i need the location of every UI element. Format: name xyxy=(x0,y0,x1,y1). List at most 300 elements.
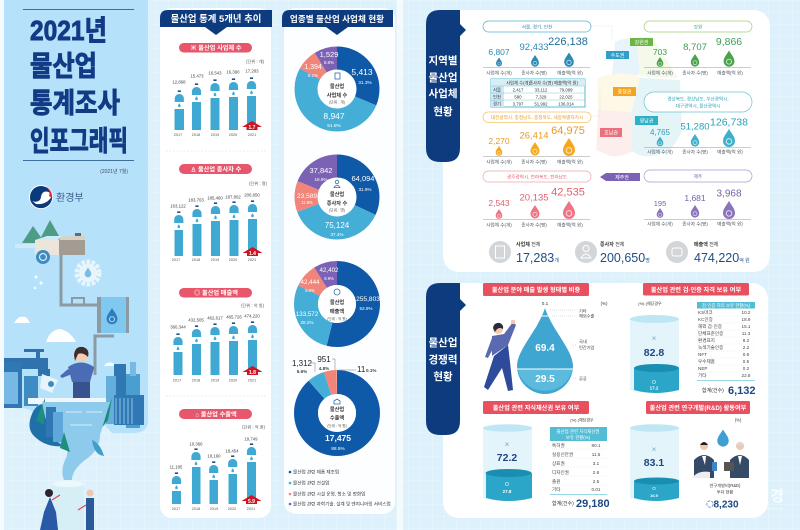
total: sales xyxy=(666,241,750,265)
region: Seoul Gyeonggi Incheon: 매출액(억 원) xyxy=(557,70,583,76)
donut: employees: 18.9% xyxy=(314,177,328,182)
region: Gwangju Jeolla: 20,135 xyxy=(519,192,549,204)
region: Seoul Gyeonggi Incheon: 92,433 xyxy=(519,42,549,53)
chart: number of employees: 2017 xyxy=(172,258,180,262)
chart: number of businesses: 16,543 xyxy=(208,70,222,76)
icon: large water drop: 69.4 xyxy=(535,343,555,354)
total: employees: 종사자 전체 xyxy=(600,241,625,248)
region: Gwangju Jeolla: 42,535 xyxy=(551,186,585,198)
donut: businesses: 31.3% xyxy=(358,80,373,86)
map: Korea regions: 영남권 xyxy=(640,118,654,124)
table: IP types: 출원 xyxy=(552,478,560,485)
region: Gwangju Jeolla: 2,543 xyxy=(488,198,510,208)
table: certification types: 22.8 xyxy=(742,373,751,378)
table: IP types: 디자인권 xyxy=(552,469,569,476)
table: certification types: 10.2 xyxy=(742,310,751,315)
chart: number of employees: 163,122 xyxy=(170,204,186,208)
map: Korea regions: 호남권 xyxy=(604,130,618,136)
table: certification types: NFT xyxy=(698,352,707,357)
chart: sales: 465,726 xyxy=(226,314,242,320)
map: Korea regions: 충청권 xyxy=(618,88,632,96)
region: Daejeon Chungcheong Sejong: 64,975 xyxy=(551,125,585,137)
table: Seoul Incheon Gyeonggi: 경기 xyxy=(493,100,501,108)
text: R&D total: 연구개발비(R&D) xyxy=(710,482,741,489)
section: certifications xyxy=(630,283,756,397)
region: Jeju: 195 xyxy=(654,199,666,208)
chart: cylinder 72.2: 27.8 xyxy=(503,489,512,494)
total: employees: 200,650명 xyxy=(600,251,650,265)
donut: employees: 37,842 xyxy=(310,166,332,175)
chart: number of businesses: 2019 xyxy=(211,133,219,137)
heading tab: regional xyxy=(426,10,466,162)
table: Seoul Incheon Gyeonggi: 3,797 xyxy=(513,102,524,106)
donut: sales: 8.9% xyxy=(305,288,315,293)
donut: businesses: 사업체 수 xyxy=(327,91,347,99)
chart: number of employees xyxy=(170,164,268,262)
table: certification types: 해외 갑·인증 xyxy=(698,323,722,330)
donut: exports: 17,475 xyxy=(325,433,351,443)
chart: exports xyxy=(170,409,266,511)
region: Jeju: 3,968 xyxy=(716,188,742,200)
chart: number of businesses: 15,473 xyxy=(190,74,204,78)
chart: number of businesses: 16,390 xyxy=(226,70,240,74)
donut: sales: 물산업 xyxy=(330,298,344,306)
table: certification types: NEP xyxy=(698,366,707,371)
chart: cylinder 83.1: 16.9 xyxy=(650,493,659,498)
region: Gyeongsang Busan Daegu Ulsan: 종사자 수(명) xyxy=(682,148,708,156)
donut: exports: 수출액 xyxy=(330,414,344,422)
table: IP types: 2.5 xyxy=(593,479,600,484)
donut: sales: 매출액 xyxy=(330,307,344,315)
chart: cylinder 82.8: 17.2 xyxy=(650,386,659,390)
section: sales by source: 기타 xyxy=(579,308,587,314)
chart: sales: (단위 : 억 원) xyxy=(241,302,265,309)
region: Gangwon: 703 xyxy=(653,47,667,57)
chart: exports: 18,190 xyxy=(207,454,221,458)
legend: sectors: 물산업 관련 건설업 xyxy=(293,480,329,486)
icon: large water drop xyxy=(517,308,573,394)
table: certification types: 2.2 xyxy=(743,345,750,350)
donut: exports: 4.8% xyxy=(319,366,329,371)
chart: cylinder 72.2: O xyxy=(505,482,509,488)
donut: employees: 75,124 xyxy=(325,221,350,230)
region: Gwangju Jeolla: 사업체 수(개) xyxy=(486,222,512,228)
chart: cylinder 82.8: O xyxy=(652,380,656,386)
section: sales by source: 민간기업 xyxy=(579,344,595,351)
chart: exports: 18,454 xyxy=(225,448,239,454)
chart: exports: 2019 xyxy=(210,507,218,511)
total: businesses xyxy=(489,241,559,265)
region: Gangwon: 8,707 xyxy=(683,42,707,53)
chart: sales: 360,344 xyxy=(170,324,186,330)
text: R&D total: 8,230 xyxy=(713,500,739,510)
table: certification types: 합계(건수) xyxy=(702,387,724,394)
table: Seoul Incheon Gyeonggi: 서울 xyxy=(493,86,501,94)
donut: businesses: 1,394 xyxy=(304,64,322,71)
region: Daejeon Chungcheong Sejong: 매출액(억 원) xyxy=(557,158,583,166)
region: Daejeon Chungcheong Sejong: 2,270 xyxy=(488,136,510,146)
chart: number of employees: 2020 xyxy=(229,258,237,262)
text: R&D total: 투자 현황 xyxy=(717,488,733,496)
donut: sales: 28.2% xyxy=(300,320,314,325)
chart: number of employees: 183,703 xyxy=(188,198,204,202)
illustration: water supply cycle xyxy=(4,220,144,530)
chart: number of businesses: ▣ 물산업 사업체 수 xyxy=(190,44,242,52)
region: Jeju: 사업체 수(개) xyxy=(647,220,673,228)
panel: regional businesses xyxy=(426,10,770,272)
chart: number of employees: ♙ 물산업 종사자 수 xyxy=(191,166,242,174)
table: certification types: 6,132 xyxy=(728,385,756,397)
chart: number of employees: 187,802 xyxy=(225,194,241,200)
illustration: researchers xyxy=(692,442,749,478)
donut: sales xyxy=(296,267,380,335)
chart: number of businesses: 1.7 xyxy=(249,125,256,131)
section: sales by source: 국내 xyxy=(579,338,587,345)
chart: sales: 2021 xyxy=(248,378,256,382)
donut: sales: 133,572 xyxy=(296,311,319,318)
total: sales: 474,220억 원 xyxy=(694,251,750,265)
donut: employees: 37.4% xyxy=(330,232,344,237)
table: certification types: 15.1 xyxy=(742,324,751,329)
region: Gwangju Jeolla: 매출액(억 원) xyxy=(557,222,583,228)
region: Seoul Gyeonggi Incheon: 사업체 수(개) xyxy=(486,70,512,76)
region: Gangwon: 종사자 수(명) xyxy=(682,70,708,76)
chart: sales: ◎ 물산업 매출액 xyxy=(194,289,238,297)
heading: 5-year trends: 물산업 통계 5개년 추이 xyxy=(171,13,261,24)
title: 통계조사 xyxy=(30,88,120,118)
table: certification types: 0.6 xyxy=(743,352,750,357)
section: sales by source: (%) xyxy=(601,301,608,306)
map: Korea regions: 수도권 xyxy=(611,52,625,59)
donut: employees: 물산업 xyxy=(330,190,344,198)
region: Gyeongsang Busan Daegu Ulsan: 사업체 수(개) xyxy=(647,148,673,156)
chart: sales: 2018 xyxy=(192,378,200,382)
table: Seoul Incheon Gyeonggi: 79,099 xyxy=(559,88,573,92)
region: Jeju: 매출액(억 원) xyxy=(717,220,743,228)
donut: exports: 1,312 xyxy=(292,359,313,368)
region: Jeju: 제주 xyxy=(694,173,702,180)
donut: businesses: 8,947 xyxy=(323,111,345,121)
table: Seoul Incheon Gyeonggi: 사업체 수(개) xyxy=(506,80,530,86)
heading tab: regional: 물산업 xyxy=(429,71,457,84)
region: Seoul Gyeonggi Incheon: 6,807 xyxy=(488,47,510,57)
section: certifications: 물산업 관련 검·인증 자격 보유 여부 xyxy=(651,286,741,294)
region: Gyeongsang Busan Daegu Ulsan xyxy=(644,92,752,156)
donut: sales: 255,803 xyxy=(356,296,380,303)
donut: employees: 23,589 xyxy=(297,193,317,200)
chart: number of businesses: 12,868 xyxy=(172,80,186,84)
region: Gwangju Jeolla: 광주광역시, 전라북도, 전라남도 xyxy=(507,174,567,180)
section: sales by source: 공공 xyxy=(579,376,587,381)
region: Daejeon Chungcheong Sejong: 26,414 xyxy=(519,130,549,142)
section: R&D: 물산업 관련 연구개발(R&D) 활동여부 xyxy=(650,404,747,412)
table: IP types xyxy=(550,427,610,510)
chart: exports: 11,185 xyxy=(170,464,183,470)
table: Seoul Incheon Gyeonggi: 매출액(억 원) xyxy=(554,80,578,86)
chart: sales: 2019 xyxy=(211,378,219,382)
donut: exports xyxy=(292,355,376,452)
chart: cylinder 82.8: × xyxy=(652,334,657,343)
table: Seoul Incheon Gyeonggi: 51,992 xyxy=(534,102,548,106)
region: Daejeon Chungcheong Sejong: 대전광역시, 충청남도, 충청북도, 세종특별자치시 xyxy=(491,114,583,121)
table: certification types: 18.9 xyxy=(742,317,751,322)
table: Seoul Incheon Gyeonggi xyxy=(491,79,585,108)
chart: number of businesses xyxy=(172,43,265,137)
section: sales by source xyxy=(483,283,608,394)
donut: employees: 64,094 xyxy=(352,174,374,183)
region: Gyeongsang Busan Daegu Ulsan: 대구광역시, 울산광역시 xyxy=(676,102,720,110)
region: Gyeongsang Busan Daegu Ulsan: 4,765 xyxy=(650,128,671,137)
donut: employees xyxy=(297,166,374,237)
donut: exports: 11 xyxy=(357,365,366,374)
donut: sales: 42,444 xyxy=(301,279,320,286)
chart: cylinder 72.2 xyxy=(483,424,532,501)
logo: ministry of environment xyxy=(28,184,84,209)
legend: sectors: 물산업 관련 제품 제조업 xyxy=(293,468,339,476)
chart: number of businesses: 2021 xyxy=(248,133,256,137)
table: IP types: 상표권 xyxy=(552,460,565,466)
table: IP types: 11.5 xyxy=(592,452,601,457)
donut: employees: 31.9% xyxy=(358,187,372,192)
donut: sales: 42,402 xyxy=(320,267,339,274)
table: Seoul Incheon Gyeonggi: 종사자 수(명) xyxy=(529,80,553,86)
chart: exports: 2021 xyxy=(247,507,255,511)
table: certification types: 녹색기술인증 xyxy=(698,344,723,351)
region: Gangwon: 매출액(억 원) xyxy=(717,70,743,76)
region: Daejeon Chungcheong Sejong: 종사자 수(명) xyxy=(521,158,547,166)
region: Daejeon Chungcheong Sejong xyxy=(483,112,591,166)
chart: number of employees: 185,460 xyxy=(207,196,223,200)
heading: businesses by sector xyxy=(282,10,393,35)
table: certification types: 환경표지 xyxy=(698,337,715,344)
logo: ministry of environment: 환경부 xyxy=(56,191,84,204)
donut: sales: 8.9% xyxy=(324,276,334,281)
donut: exports: 88.5% xyxy=(331,446,346,452)
chart: cylinder 82.8: 82.8 xyxy=(644,347,664,359)
title: 인포그래픽 xyxy=(30,126,128,156)
table: certification types: 우수제품 xyxy=(698,358,715,365)
donut: exports: 0.1% xyxy=(366,368,376,373)
watermark xyxy=(767,488,784,511)
panel: competitiveness xyxy=(426,283,768,518)
text: R&D total xyxy=(707,482,741,510)
donut: employees: (단위 : 명) xyxy=(329,208,346,212)
chart: exports: (단위 : 억 원) xyxy=(242,424,266,430)
table: certification types: 9.2 xyxy=(743,338,750,343)
table: IP types: 보유 현황(%) xyxy=(566,434,591,441)
table: Seoul Incheon Gyeonggi: 136,014 xyxy=(558,102,574,106)
section: R&D: (%) xyxy=(735,418,742,422)
region: Gyeongsang Busan Daegu Ulsan: 126,738 xyxy=(710,116,748,128)
chart: cylinder 83.1: O xyxy=(652,486,656,491)
region: Gyeongsang Busan Daegu Ulsan: 경상북도, 경상남도, 부산광역시, xyxy=(667,96,729,102)
donut: employees: 종사자 수 xyxy=(327,199,347,207)
region: Jeju xyxy=(644,170,752,228)
table: certification types: 0.5 xyxy=(743,359,750,364)
table: Seoul Incheon Gyeonggi: 7,329 xyxy=(536,94,547,100)
heading tab: competitiveness xyxy=(426,283,466,435)
donut: businesses: (단위 : 개) xyxy=(329,100,346,104)
total: employees xyxy=(575,241,650,265)
region: Gyeongsang Busan Daegu Ulsan: 매출액(억 원) xyxy=(717,148,743,156)
chart: exports: ⌂ 물산업 수출액 xyxy=(195,410,237,418)
chart: exports: 19,749 xyxy=(244,436,258,442)
table: certification types: 0.2 xyxy=(743,366,750,371)
section: certifications: (%) (해당경우 xyxy=(638,300,662,306)
chart: sales xyxy=(170,288,265,382)
panel: businesses by sector xyxy=(282,8,395,514)
table: IP types: 3.1 xyxy=(593,461,600,466)
chart: number of employees: 2021 xyxy=(248,258,256,262)
chart: number of businesses: (단위 : 개) xyxy=(246,58,265,65)
section: intellectual property: 물산업 관련 지식재산권 보유 여부 xyxy=(493,404,580,412)
heading tab: regional: 사업체 xyxy=(429,87,457,100)
chart: exports: 2017 xyxy=(172,507,180,511)
title: 2021년 xyxy=(30,15,107,46)
table: IP types: 2.8 xyxy=(593,470,600,475)
section: sales by source: 물산업 분야 매출 발생 형태별 비중 xyxy=(492,286,580,294)
chart: number of employees: 200,650 xyxy=(244,192,260,198)
chart: sales: 2020 xyxy=(229,378,237,382)
panel: title sidebar xyxy=(4,0,148,530)
table: IP types: 0.01 xyxy=(592,487,601,492)
table: IP types: 실용신안권 xyxy=(552,451,573,457)
chart: exports: 2018 xyxy=(192,507,200,511)
title xyxy=(30,15,128,156)
table: certification types: 기타 xyxy=(698,372,707,379)
table: Seoul Incheon Gyeonggi: 22,025 xyxy=(559,94,573,100)
region: Gwangju Jeolla xyxy=(483,171,591,228)
total: businesses: 17,283개 xyxy=(516,251,559,265)
panel: 5-year trends xyxy=(160,8,272,518)
watermark: 경 xyxy=(770,488,784,505)
region: Jeju: 1,681 xyxy=(684,193,706,203)
chart: sales: 2017 xyxy=(173,378,181,382)
donut: businesses xyxy=(304,50,373,129)
table: IP types: 합계(건수) xyxy=(552,500,574,507)
chart: sales: 432,505 xyxy=(188,318,204,322)
chart: sales: 462,617 xyxy=(207,316,223,320)
heading tab: competitiveness: 물산업 xyxy=(429,336,457,349)
donut: businesses: 8.8% xyxy=(324,60,334,65)
map: Korea regions xyxy=(591,26,682,181)
region: Gangwon xyxy=(644,21,752,76)
donut: exports: 물산업 xyxy=(330,405,344,413)
chart: number of employees: 2019 xyxy=(211,258,219,262)
chart: sales: 474,220 xyxy=(244,314,260,318)
date note: (2021년 7월) xyxy=(100,168,128,175)
table: certification types: KS마크 xyxy=(698,309,713,316)
watermark: BUREAU xyxy=(767,506,783,511)
map: Korea regions: 강원권 xyxy=(635,39,649,46)
donut: businesses: 물산업 xyxy=(330,82,344,90)
region: Gangwon: 강원 xyxy=(694,24,702,30)
chart: number of businesses: 2017 xyxy=(174,133,182,137)
legend: sectors xyxy=(289,468,391,508)
total: businesses: 사업체 전체 xyxy=(516,241,541,248)
donut: exports: 6.6% xyxy=(297,369,307,374)
chart: number of employees: 1.4 xyxy=(249,251,256,257)
region: Jeju: 종사자 수(명) xyxy=(682,220,708,228)
table: certification types xyxy=(697,302,756,397)
chart: number of businesses: 2020 xyxy=(229,133,237,137)
chart: cylinder 83.1: 83.1 xyxy=(644,457,664,469)
map: Korea regions: 제주권 xyxy=(615,174,629,181)
chart: cylinder 83.1: × xyxy=(652,445,657,454)
chart: cylinder 82.8 xyxy=(630,315,679,393)
heading tab: competitiveness: 경쟁력 xyxy=(429,353,457,366)
chart: number of employees: 2018 xyxy=(192,258,200,262)
region: Gyeongsang Busan Daegu Ulsan: 51,280 xyxy=(680,122,710,132)
donut: sales: (단위 : 억 원) xyxy=(327,316,347,321)
section: R&D xyxy=(630,401,750,510)
chart: cylinder 72.2: 72.2 xyxy=(497,452,517,464)
icon: large water drop: 29.5 xyxy=(535,374,555,385)
region: Gangwon: 9,866 xyxy=(716,36,742,48)
donut: businesses: 5,413 xyxy=(351,67,373,77)
legend: sectors: 물산업 관련 과학기술, 설계 및 엔지니어링 서비스업 xyxy=(293,500,391,508)
table: IP types: 29,180 xyxy=(576,498,610,510)
chart: number of businesses: 17,283 xyxy=(245,68,259,74)
region: Seoul Gyeonggi Incheon: 서울, 경기, 인천 xyxy=(522,24,552,30)
chart: exports: 5.9 xyxy=(248,499,255,505)
section: intellectual property xyxy=(483,401,610,510)
chart: exports: 10,366 xyxy=(189,442,203,446)
section: intellectual property: (%) (해당경우 xyxy=(570,416,594,422)
section: sales by source: 0.1 xyxy=(542,301,549,306)
icon: drop above researchers xyxy=(717,430,729,447)
legend: sectors: 물산업 관련 시설 운영, 청소 및 정화업 xyxy=(293,490,365,498)
region: Seoul Gyeonggi Incheon: 종사자 수(명) xyxy=(521,70,547,76)
region: Gwangju Jeolla: 종사자 수(명) xyxy=(521,222,547,228)
donut: exports: 951 xyxy=(317,355,331,364)
table: IP types: 80.1 xyxy=(592,443,601,448)
heading tab: competitiveness: 현황 xyxy=(433,370,453,383)
table: certification types: 단체표준인증 xyxy=(698,330,723,337)
donut: sales: 53.9% xyxy=(359,306,373,311)
total: sales: 매출액 전체 xyxy=(694,241,719,248)
heading tab: regional: 현황 xyxy=(433,105,453,118)
table: certification types: 11.3 xyxy=(742,331,751,336)
illustration: person pointing at drop xyxy=(484,320,516,391)
region: Daejeon Chungcheong Sejong: 사업체 수(개) xyxy=(486,158,512,166)
table: Seoul Incheon Gyeonggi: 580 xyxy=(514,94,522,100)
illustration: people at water glass xyxy=(40,481,94,530)
table: Seoul Incheon Gyeonggi: 인천 xyxy=(493,94,501,100)
table: certification types: KC인증 xyxy=(698,316,713,322)
heading: 5-year trends xyxy=(160,10,272,35)
region: Seoul Gyeonggi Incheon: 226,138 xyxy=(548,36,588,48)
donut: businesses: 51.8% xyxy=(327,123,342,129)
region: Gangwon: 사업체 수(개) xyxy=(647,70,673,76)
chart: sales: 1.8 xyxy=(249,370,256,376)
chart: cylinder 72.2: × xyxy=(505,440,510,449)
title: 물산업 xyxy=(30,50,97,82)
chart: exports: 2020 xyxy=(228,507,236,511)
chart: cylinder 83.1 xyxy=(630,424,679,501)
donut: businesses: 8.1% xyxy=(308,73,318,78)
table: certification types: 검·인증 처리 보유 현황(%) xyxy=(702,302,751,309)
table: IP types: 특허권 xyxy=(552,442,565,449)
region: Seoul Gyeonggi Incheon xyxy=(483,21,591,76)
donut: businesses: 1,529 xyxy=(320,50,338,59)
donut: employees: 11.8% xyxy=(301,200,313,205)
heading: businesses by sector: 업종별 물산업 사업체 현황 xyxy=(290,13,384,24)
heading tab: regional: 지역별 xyxy=(429,54,457,67)
donut: exports: (단위 : 억 원) xyxy=(327,423,347,428)
table: Seoul Incheon Gyeonggi: 33,112 xyxy=(535,88,548,92)
table: IP types: 물산업 관련 지식재산권 xyxy=(557,428,599,435)
